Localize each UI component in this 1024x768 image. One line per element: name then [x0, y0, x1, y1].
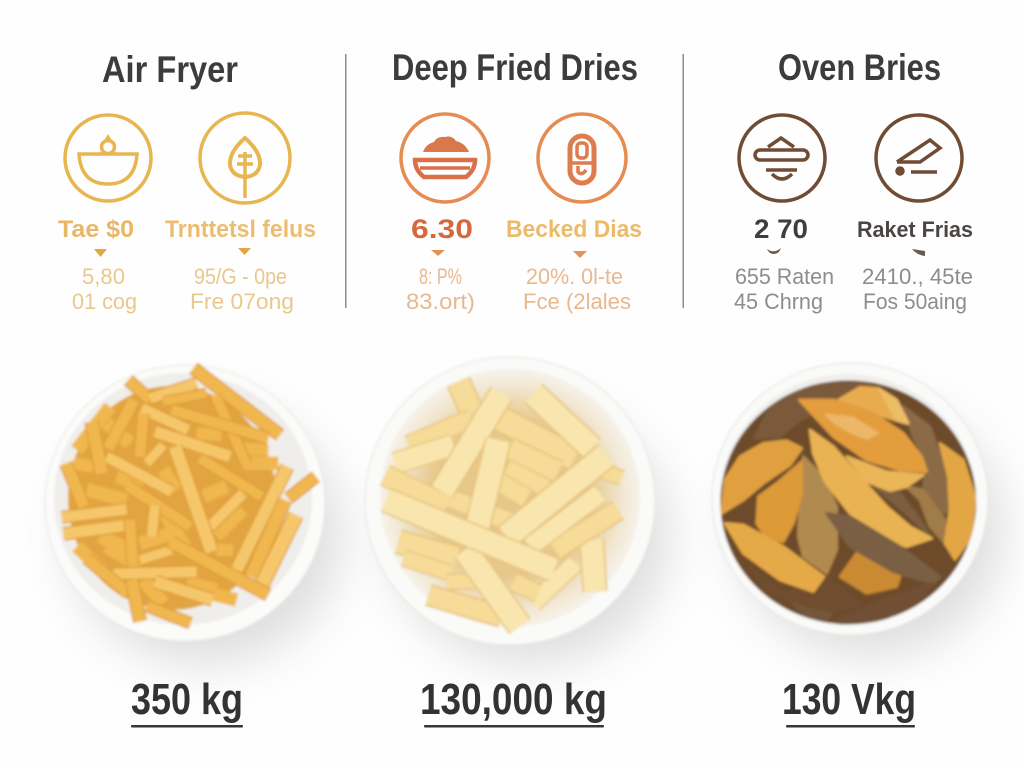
- stat text right: Fce (2lales: [523, 289, 631, 314]
- label: 6.30: 6.30: [411, 214, 473, 244]
- marker: [767, 248, 781, 254]
- stat text right: 2410., 45te: [862, 264, 973, 289]
- marker: [573, 251, 587, 258]
- label: becked dias: Becked Dias: [506, 216, 642, 243]
- icon: bowl: [65, 115, 151, 201]
- marker: [238, 248, 251, 255]
- stat text left: [72, 264, 137, 314]
- bowl: deep fried fries: [365, 357, 655, 645]
- icon: plate of food: [401, 114, 489, 202]
- divider right: [682, 54, 684, 308]
- bowl shadows: [70, 405, 1002, 663]
- stat text left: 8: P%: [419, 264, 462, 289]
- label: trnttetsl felus: Trnttetsl felus: [165, 216, 316, 243]
- divider left: [345, 54, 346, 308]
- icon: wedge and line: [876, 115, 962, 201]
- label: tae: Tae $0: [58, 216, 134, 243]
- bowl: air fryer fries: [45, 365, 325, 641]
- panel: oven stats: [734, 47, 973, 314]
- stat text left: 45 Chrng: [734, 289, 823, 314]
- label: 2 70: 2 70: [754, 214, 808, 244]
- icon: capsule: [538, 114, 626, 202]
- label: raket frias: Raket Frias: [857, 217, 973, 242]
- stat text right: [190, 264, 294, 314]
- stat text right: 95/G - 0pe: [194, 264, 287, 289]
- stat text left: [734, 264, 834, 314]
- heading: oven: Oven Bries: [778, 47, 941, 88]
- total: deep fried: 130,000 kg: [420, 675, 607, 724]
- stat text right: Fre 07ong: [190, 289, 294, 314]
- icon: leaf tree: [200, 113, 290, 203]
- stat text left: 01 cog: [72, 289, 137, 314]
- total: oven: 130 Vkg: [782, 675, 916, 724]
- stat text left: 655 Raten: [735, 264, 834, 289]
- panel: air fryer stats: [58, 49, 316, 314]
- marker: [912, 249, 925, 256]
- panel: deep fried stats: [392, 47, 642, 314]
- total: air fryer: 350 kg: [131, 675, 243, 724]
- stat text right: Fos 50aing: [863, 289, 967, 314]
- stat text right: [862, 264, 973, 314]
- marker: [431, 250, 445, 256]
- icon: layered hat: [739, 115, 825, 201]
- marker: [94, 249, 107, 257]
- heading: air fryer: Air Fryer: [102, 49, 238, 90]
- stat text left: [406, 264, 475, 314]
- bowl: oven wedges: [712, 363, 988, 635]
- stat text right: 20%. 0l-te: [526, 264, 623, 289]
- stat text right: [523, 264, 631, 314]
- heading: deep fried: Deep Fried Dries: [392, 47, 638, 88]
- stat text left: 83.ort): [406, 289, 475, 314]
- stat text left: 5,80: [82, 264, 125, 289]
